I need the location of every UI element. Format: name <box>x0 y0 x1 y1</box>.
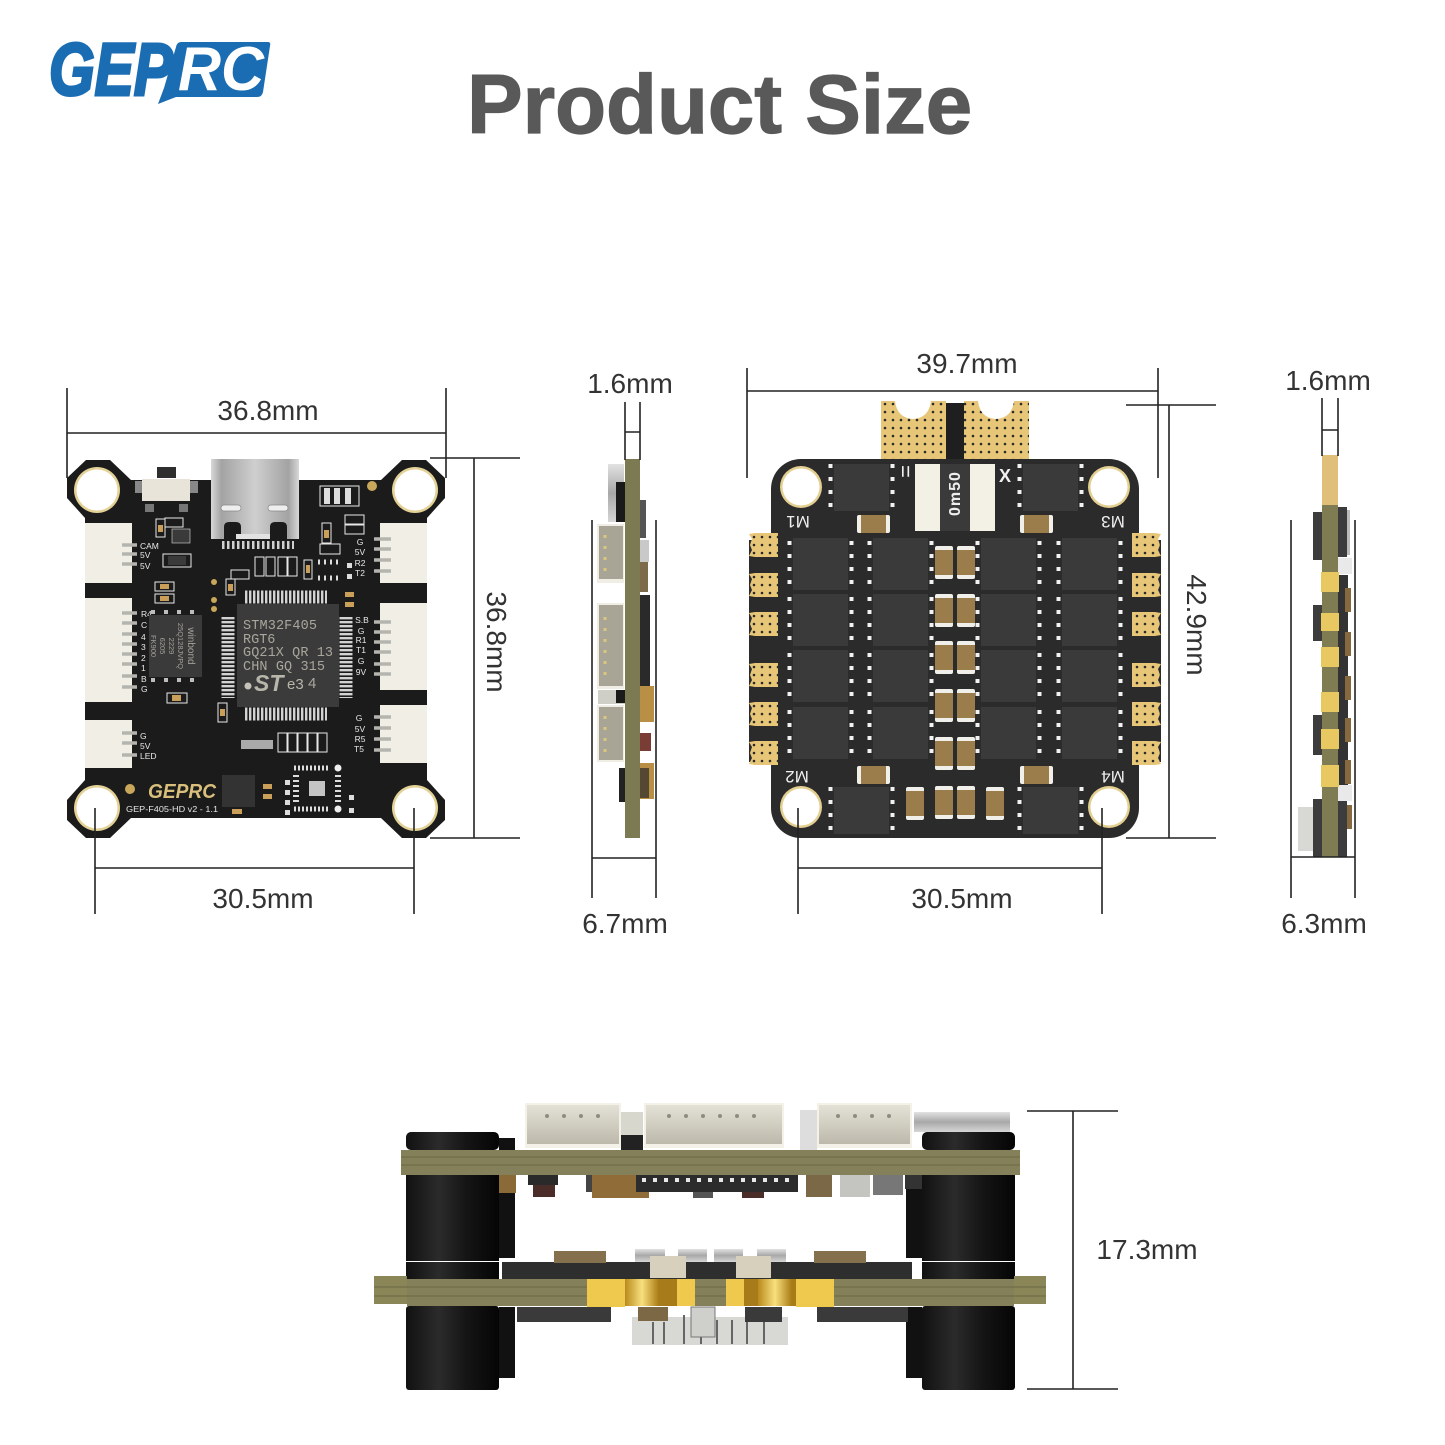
dimension: ESC PCB thickness 1.6mm: 1.6mm <box>1285 365 1371 396</box>
pin labels: T2 <box>355 568 365 578</box>
USB and rear parts <box>914 1112 1010 1132</box>
side switch <box>135 467 198 512</box>
white connectors <box>525 1103 912 1148</box>
pin labels: 5V <box>355 724 366 734</box>
capacitors <box>857 515 1053 820</box>
pin labels: LED <box>140 751 157 761</box>
pin labels: 4 <box>141 632 146 642</box>
FC side view <box>597 459 654 838</box>
STM32 processor: CHN GQ 315 <box>243 660 325 675</box>
dimension: FC width 36.8mm: 36.8mm <box>217 395 319 426</box>
STM32 processor: e3 <box>287 676 304 693</box>
STM32 processor: 4 <box>308 675 316 692</box>
pin labels: R4 <box>141 609 152 619</box>
STM32 processor: RGT6 <box>243 633 275 648</box>
winbond flash chip: winbond <box>185 626 196 665</box>
dimension: FC depth 6.7mm: 6.7mm <box>582 908 668 939</box>
dimension: FC width 36.8mm <box>67 388 446 478</box>
small SMD parts <box>155 486 364 752</box>
lower PCB <box>374 1276 1046 1306</box>
side motor pads <box>749 533 1161 765</box>
pin labels: 3 <box>141 642 146 652</box>
pin labels: C <box>141 620 147 630</box>
mounting holes <box>780 466 1130 828</box>
dimension: FC height 36.8mm: 36.8mm <box>481 591 512 693</box>
ESC board, top view <box>749 401 1161 838</box>
gyro and small chip <box>222 764 354 815</box>
dimension: ESC PCB thickness 1.6mm <box>1285 365 1371 456</box>
silkscreen logo and board name <box>126 781 218 814</box>
motor labels: M4 <box>1101 767 1125 786</box>
motor labels: M1 <box>786 512 810 531</box>
pin labels: CAM <box>140 541 159 551</box>
ESC side view <box>1298 455 1352 857</box>
pin labels: 5V <box>140 741 151 751</box>
dimension: FC PCB thickness 1.6mm: 1.6mm <box>587 368 673 399</box>
pin labels: 1 <box>141 663 146 673</box>
pin labels: G <box>140 731 147 741</box>
pin labels: R1 <box>356 635 367 645</box>
winbond flash chip: 2229 <box>167 638 176 654</box>
pin labels: R2 <box>355 558 366 568</box>
pin labels: S.B <box>355 615 369 625</box>
parts under lower board <box>517 1307 908 1345</box>
STM32 processor: ST <box>254 670 285 696</box>
pin labels: 5V <box>140 561 151 571</box>
dimension: FC hole spacing 30.5mm: 30.5mm <box>212 883 314 914</box>
pin labels <box>140 537 369 761</box>
winbond flash chip <box>149 612 202 680</box>
white connectors <box>85 523 427 768</box>
logo: GEPRC: RC <box>178 35 265 104</box>
dimension: ESC depth 6.3mm: 6.3mm <box>1281 908 1367 939</box>
pin labels: G <box>141 684 148 694</box>
polarity marks <box>893 465 1011 486</box>
pin labels: B <box>141 674 147 684</box>
pin labels: G <box>358 626 364 636</box>
pin labels: 9V <box>356 667 367 677</box>
dimension: ESC hole spacing 30.5mm <box>798 808 1102 914</box>
dimension: ESC width 39.7mm: 39.7mm <box>916 348 1018 379</box>
MOSFET grid <box>790 464 1120 834</box>
title: Product Size <box>467 58 972 151</box>
board outline <box>67 460 445 838</box>
pin labels: G <box>358 656 364 666</box>
winbond flash chip: 6205 <box>158 638 167 654</box>
shunt resistor: 0m50 <box>947 471 964 516</box>
polarity marks: = <box>893 465 918 478</box>
front standoffs <box>406 1132 1015 1390</box>
pin labels: 2 <box>141 653 146 663</box>
dimension: FC height 36.8mm <box>430 458 520 838</box>
dimension: FC PCB thickness 1.6mm <box>587 368 673 460</box>
motor labels: M2 <box>785 767 809 786</box>
STM32 processor: GQ21X QR 13 <box>243 646 333 661</box>
pin labels: 5V <box>140 550 151 560</box>
pin labels: G <box>357 537 363 547</box>
connector pins <box>122 539 391 755</box>
dimension: stack height 17.3mm: 17.3mm <box>1096 1234 1198 1265</box>
dimension: ESC height 42.9mm: 42.9mm <box>1181 574 1212 676</box>
pin labels: T5 <box>354 744 364 754</box>
silkscreen logo and board name: GEPRC <box>148 781 217 803</box>
winbond flash chip: FK900 <box>149 635 158 657</box>
gold motor pads <box>587 1279 834 1307</box>
motor labels <box>785 512 1125 786</box>
pin labels: T1 <box>356 645 366 655</box>
logo: GEPRC: GEP <box>49 28 174 111</box>
motor labels: M3 <box>1101 512 1125 531</box>
components on lower board <box>502 1249 912 1279</box>
STM32 processor: STM32F405 <box>243 619 317 634</box>
pin labels: R5 <box>355 734 366 744</box>
stacked assembly, side view <box>374 1103 1046 1390</box>
dimension: FC hole spacing 30.5mm <box>95 808 414 914</box>
STM32 processor <box>228 597 346 714</box>
copper battery pads <box>881 401 1029 459</box>
pin labels: G <box>356 713 362 723</box>
top PCB <box>401 1150 1020 1175</box>
USB-C port <box>211 459 299 545</box>
dimension: ESC hole spacing 30.5mm: 30.5mm <box>911 883 1013 914</box>
dimension: ESC height 42.9mm <box>1126 405 1216 838</box>
rear standoffs <box>499 1138 922 1378</box>
dimension: stack height 17.3mm <box>1027 1111 1198 1389</box>
winbond flash chip: 25Q128JVPQ <box>176 623 185 669</box>
board outline <box>749 540 775 762</box>
polarity marks: X <box>999 466 1011 486</box>
dimension: FC depth 6.7mm <box>582 520 668 939</box>
flight controller board, top view <box>67 459 445 838</box>
mounting holes <box>74 467 438 831</box>
dimension: ESC depth 6.3mm <box>1281 520 1367 939</box>
silkscreen logo and board name: GEP-F405-HD v2 - 1.1 <box>126 804 218 814</box>
components under top board <box>499 1175 922 1198</box>
dimension: ESC width 39.7mm <box>747 348 1158 478</box>
shunt resistor <box>915 464 995 531</box>
pin labels: 5V <box>355 547 366 557</box>
